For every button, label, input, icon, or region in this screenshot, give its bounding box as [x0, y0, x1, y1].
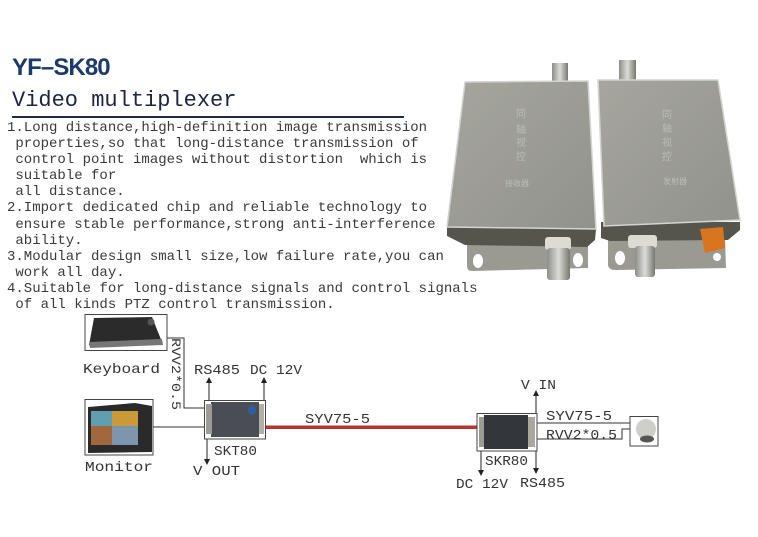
product photo: transmitter unit: 控: [662, 150, 672, 164]
label: monitor: Monitor: [85, 460, 153, 476]
wiring lines: [153, 338, 630, 439]
cable label: RVV2*0.5 vertical: RVV2*0.5: [168, 338, 183, 410]
product photo: receiver unit: [447, 63, 596, 280]
diagram labels: DC 12V: [250, 363, 303, 379]
label: keyboard: Keyboard: [83, 362, 160, 378]
diagram labels: V IN: [521, 378, 556, 394]
arrows: [207, 378, 536, 475]
diagram labels: SKR80: [485, 454, 528, 470]
icon: monitor: [85, 400, 153, 455]
device: SKR80 receiver: [477, 414, 537, 451]
diagram labels: SKT80: [214, 444, 257, 460]
diagram labels: V OUT: [193, 464, 240, 480]
product photo: receiver unit: 控: [516, 150, 526, 164]
red coaxial cable: [266, 426, 477, 429]
product photo: receiver unit: 同: [516, 108, 526, 121]
feature list text: 1.Long distance,high-definition image transmission properties,so that long-distance transmission of control point images without distortion which is suitable for all distance. 2.Import dedicated chip and reliable technology to ensure stable performance,strong anti-interference ability. 3.Modular design small size,low failure rate,you can work all day. 4.Suitable for long-distance signals and control signals of all kinds PTZ control transmission.: [7, 120, 477, 313]
product photo: receiver unit: 接收器: [505, 178, 529, 189]
title: YF–SK80: [12, 54, 110, 81]
diagram labels: [193, 363, 617, 493]
diagram labels: DC 12V: [456, 477, 509, 493]
diagram labels: RVV2*0.5: [546, 428, 617, 444]
diagram labels: SYV75-5: [305, 412, 370, 428]
device: SKT80 transmitter: [204, 400, 266, 439]
product photo: receiver unit: 视: [516, 136, 526, 150]
product photo: receiver unit: 轴: [516, 123, 526, 137]
diagram labels: RS485: [520, 476, 565, 492]
product photo: transmitter unit: [598, 60, 740, 277]
subtitle: Video multiplexer: [12, 88, 236, 113]
icon: keyboard: [85, 314, 167, 350]
product photo: transmitter unit: 视: [662, 136, 672, 150]
icon: dome camera: [630, 416, 658, 446]
diagram labels: SYV75-5: [546, 409, 612, 425]
product photo: transmitter unit: 轴: [662, 122, 672, 136]
product photo: transmitter unit: 发射器: [663, 176, 687, 187]
product photo: transmitter unit: 同: [662, 109, 672, 122]
diagram labels: RS485: [194, 363, 240, 379]
